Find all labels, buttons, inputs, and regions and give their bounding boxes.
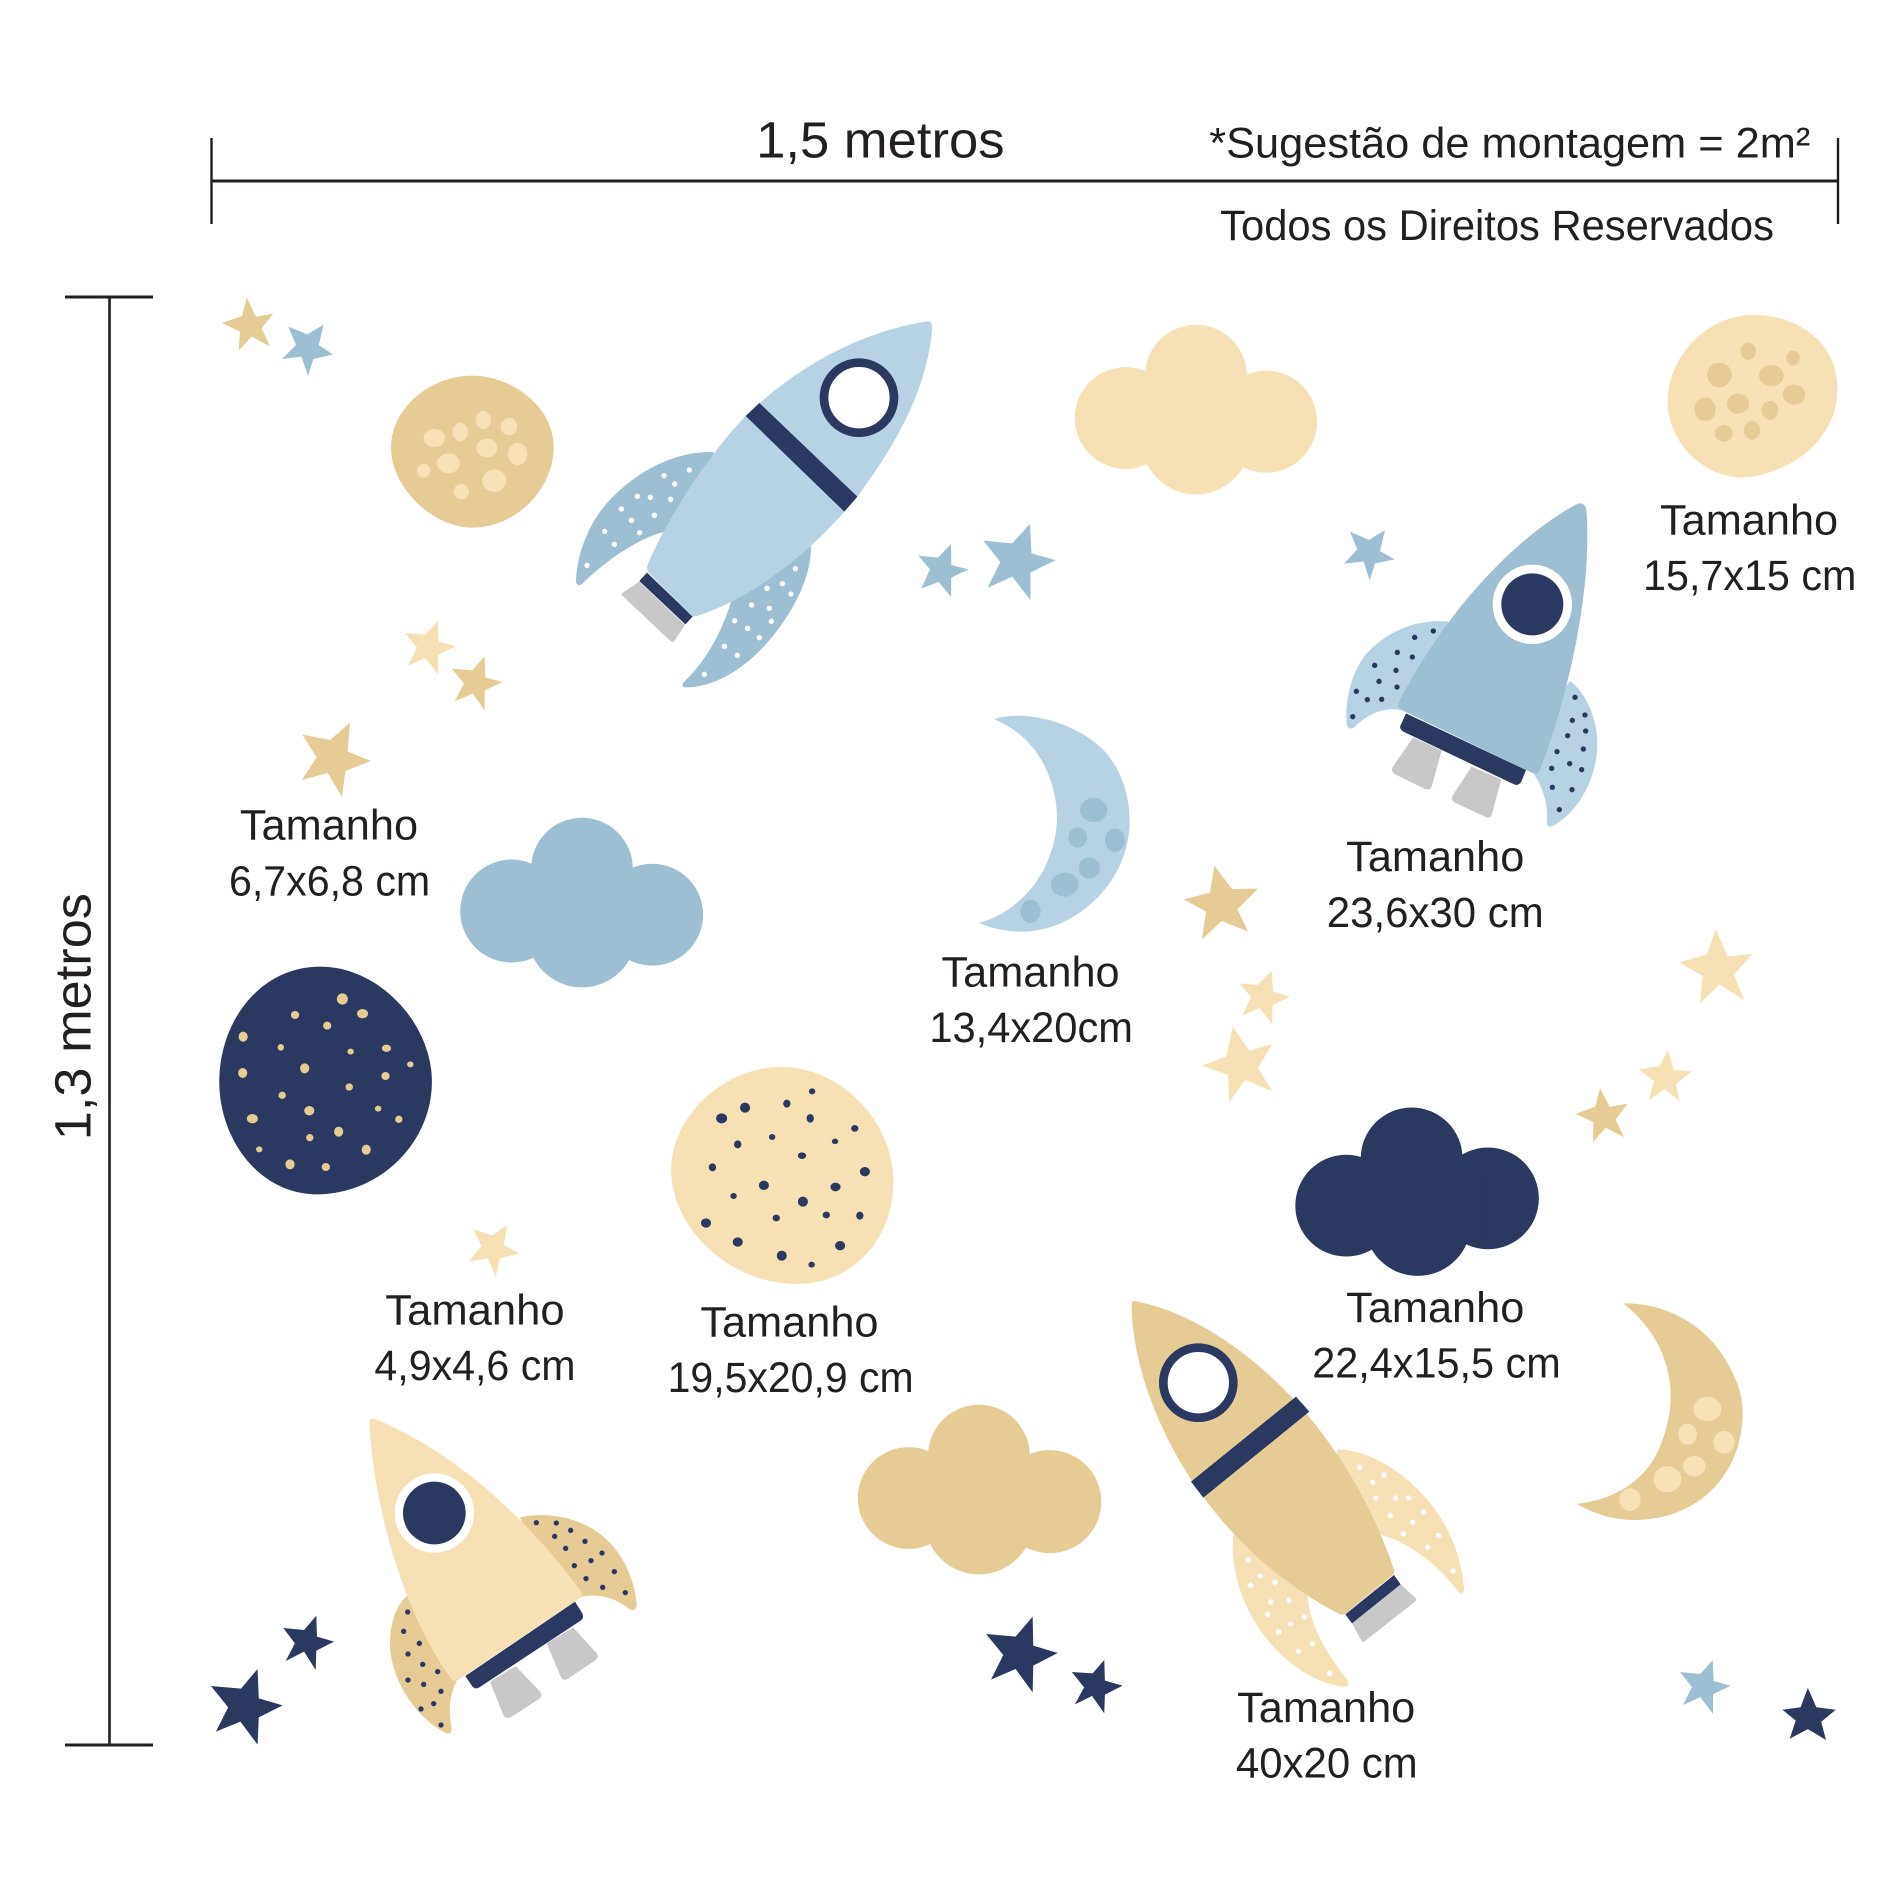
- label: 15,7x15 cm: 15,7x15 cm: [1643, 552, 1856, 599]
- stars: left tan trio: [302, 621, 502, 797]
- heading: height dimension: 1,3 metros: [44, 893, 101, 1140]
- label: 40x20 cm: 40x20 cm: [1236, 1740, 1418, 1787]
- stars: centre tan trio: [1184, 866, 1290, 1102]
- planet: light tan with navy dots: [671, 1067, 893, 1284]
- stars: navy bottom left and centre: [211, 1616, 1123, 1745]
- cloud: navy: [1295, 1107, 1539, 1276]
- cloud: blue: [460, 818, 703, 987]
- label: 19,5x20,9 cm: 19,5x20,9 cm: [668, 1354, 914, 1401]
- label: 4,9x4,6 cm: Tamanho: [385, 1286, 565, 1333]
- rocket: mid blue: [1346, 503, 1597, 827]
- cloud: dark tan: [858, 1405, 1101, 1574]
- label: 22,4x15,5 cm: 22,4x15,5 cm: [1312, 1340, 1561, 1387]
- star: light tan above label: [469, 1225, 520, 1277]
- label: 6,7x6,8 cm: 6,7x6,8 cm: [229, 857, 430, 904]
- vertical dimension bracket: [65, 297, 153, 1745]
- rocket: dark tan: [1132, 1301, 1464, 1687]
- label: 13,4x20cm: 13,4x20cm: [929, 1004, 1133, 1051]
- label: 23,6x30 cm: Tamanho: [1346, 833, 1524, 880]
- horizontal dimension bracket: [211, 138, 1838, 224]
- cloud: light tan: [1075, 325, 1317, 494]
- label: 22,4x15,5 cm: [1312, 1284, 1561, 1387]
- label: 13,4x20cm: Tamanho: [941, 948, 1120, 995]
- label: 40x20 cm: Tamanho: [1237, 1684, 1415, 1731]
- rocket: light tan: [369, 1418, 637, 1733]
- label: 6,7x6,8 cm: Tamanho: [240, 802, 418, 849]
- stars: blue pair beside rocket: [918, 524, 1056, 600]
- label: 15,7x15 cm: [1643, 496, 1856, 599]
- label: 13,4x20cm: [929, 948, 1133, 1051]
- planet: navy with dots: [219, 967, 432, 1194]
- planet: tan with craters: [391, 376, 554, 528]
- label: 22,4x15,5 cm: Tamanho: [1346, 1284, 1524, 1331]
- star: blue near second rocket: [1344, 530, 1395, 581]
- label: 23,6x30 cm: [1327, 833, 1544, 936]
- heading: width dimension: 1,5 metros: [756, 112, 1004, 169]
- label: 40x20 cm: [1236, 1684, 1418, 1787]
- label: 19,5x20,9 cm: [668, 1299, 914, 1401]
- planet: light tan with craters: [1668, 315, 1837, 477]
- moon: blue: [979, 716, 1130, 932]
- label: 4,9x4,6 cm: 4,9x4,6 cm: [374, 1342, 576, 1389]
- star: navy bottom right: [1782, 1688, 1836, 1740]
- note: rights reserved: Todos os Direitos Reservados: [1220, 202, 1774, 249]
- rocket: light blue: [576, 321, 932, 687]
- moon: tan: [1577, 1304, 1743, 1520]
- stars: right tan trio: [1576, 929, 1752, 1142]
- star: blue bottom right: [1680, 1660, 1731, 1714]
- label: 19,5x20,9 cm: Tamanho: [700, 1299, 878, 1346]
- label: 4,9x4,6 cm: [374, 1286, 576, 1389]
- label: 6,7x6,8 cm: [229, 802, 430, 904]
- stars: top left pair: [222, 298, 333, 376]
- note: mounting suggestion: *Sugestão de montagem = 2m²: [1209, 120, 1810, 167]
- label: 15,7x15 cm: Tamanho: [1660, 496, 1838, 543]
- label: 23,6x30 cm: 23,6x30 cm: [1327, 889, 1544, 936]
